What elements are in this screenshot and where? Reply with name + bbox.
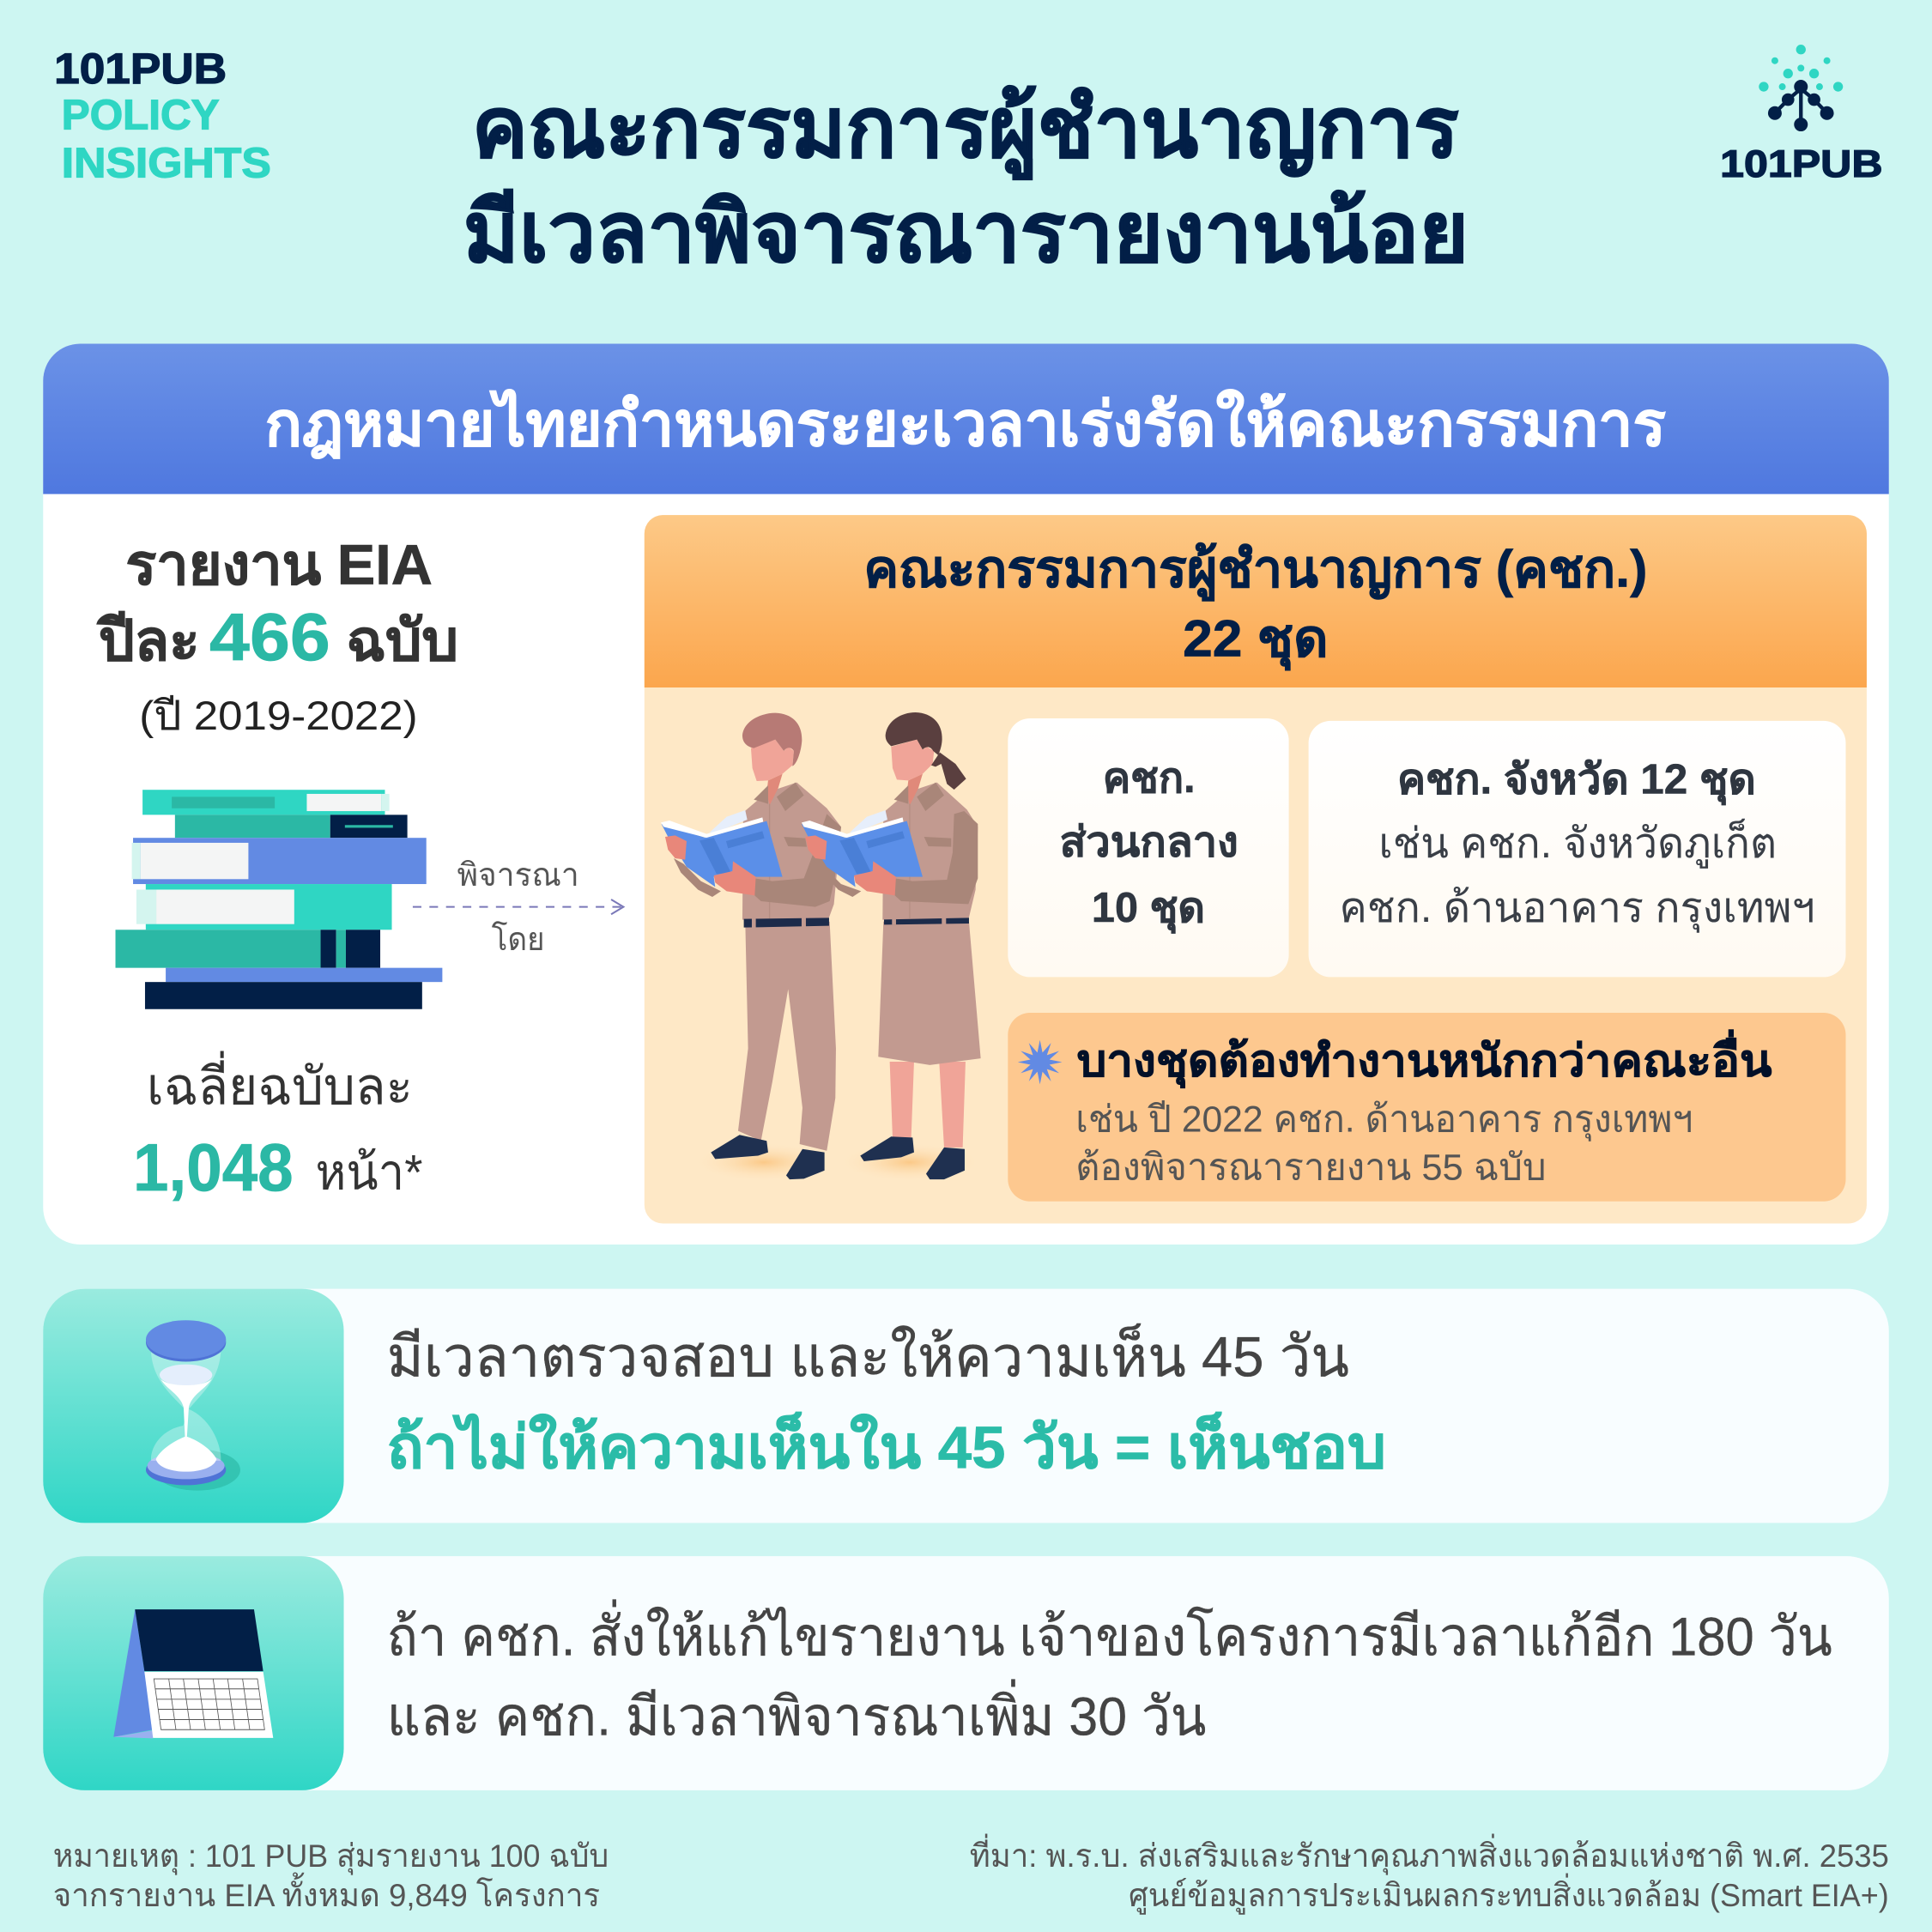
card: central committee [1008, 718, 1289, 977]
callout: heavier workload: บางชุดต้องทำงานหนักกว่าคณะอื่น [1077, 1029, 1772, 1088]
row: 45-day deadline [43, 1289, 1889, 1523]
source [970, 1833, 1889, 1915]
arrow: considered by: พิจารณา [457, 857, 579, 893]
logo: 101PUB network icon [1720, 45, 1883, 185]
committee header: 22 ชุด [1183, 609, 1329, 670]
average pages per report [133, 1051, 422, 1205]
arrow: considered by: โดย [492, 921, 545, 957]
card: provincial committee: คชก. จังหวัด 12 ชุด [1397, 757, 1756, 806]
EIA report count [96, 532, 458, 739]
icon tile [43, 1289, 344, 1523]
callout: heavier workload [1008, 1013, 1846, 1202]
icon: stack of books [116, 790, 442, 1009]
EIA report count: ฉบับ [346, 609, 458, 672]
title: คณะกรรมการผู้ชำนาญการ [472, 81, 1459, 180]
text: revision time [387, 1600, 1832, 1747]
icon: hourglass [146, 1320, 240, 1491]
text: 45-day rule [387, 1323, 1386, 1481]
panel: legal timeframe [43, 344, 1889, 1915]
EIA report count: (ปี 2019-2022) [139, 693, 418, 739]
title: มีเวลาพิจารณารายงานน้อย [463, 185, 1469, 279]
logo: 101PUB Policy Insights: INSIGHTS [62, 141, 271, 187]
text: 45-day rule: ถ้าไม่ให้ความเห็นใน 45 วัน = เห็นชอบ [387, 1412, 1386, 1481]
logo: 101PUB Policy Insights [54, 45, 271, 187]
man upper body [661, 713, 841, 928]
average pages per report: 1,048 [133, 1131, 294, 1205]
card: central committee: ส่วนกลาง [1060, 820, 1239, 866]
callout: heavier workload: ต้องพิจารณารายงาน 55 ฉบับ [1075, 1148, 1547, 1189]
logo: 101PUB network icon: 101PUB [1720, 143, 1883, 185]
text: revision time: ถ้า คชก. สั่งให้แก้ไขรายงาน เจ้าของโครงการมีเวลาแก้อีก 180 วัน [387, 1600, 1832, 1668]
callout: heavier workload: เช่น ปี 2022 คชก. ด้านอาคาร กรุงเทพฯ [1075, 1099, 1693, 1142]
logo: 101PUB Policy Insights: 101PUB [54, 45, 227, 93]
panel: expert committee [645, 515, 1867, 1224]
footnote: จากรายงาน EIA ทั้งหมด 9,849 โครงการ [53, 1872, 600, 1913]
text: revision time: และ คชก. มีเวลาพิจารณาเพิ่ม 30 วัน [387, 1679, 1206, 1747]
committee header [645, 515, 1867, 687]
EIA report count: รายงาน EIA [125, 532, 433, 596]
footnote: หมายเหตุ : 101 PUB สุ่มรายงาน 100 ฉบับ [53, 1838, 609, 1875]
title [463, 81, 1469, 279]
woman upper body [802, 712, 978, 924]
illustration: two officials reading books [661, 712, 981, 1182]
logo: 101PUB Policy Insights: POLICY [62, 93, 220, 139]
committee header: คณะกรรมการผู้ชำนาญการ (คชก.) [863, 539, 1647, 601]
text: 45-day rule: มีเวลาตรวจสอบ และให้ความเห็น 45 วัน [387, 1323, 1349, 1389]
source: ศูนย์ข้อมูลการประเมินผลกระทบสิ่งแวดล้อม (Smart EIA+) [1129, 1873, 1889, 1915]
card: provincial committee: เช่น คชก. จังหวัดภูเก็ต [1378, 818, 1777, 869]
EIA report count: 466 [209, 601, 330, 675]
icon: blue star [1018, 1040, 1062, 1084]
footnote [53, 1838, 609, 1913]
card: central committee: 10 ชุด [1092, 885, 1205, 934]
average pages per report: เฉลี่ยฉบับละ [147, 1051, 413, 1115]
average pages per report: หน้า* [316, 1145, 422, 1200]
card: central committee: คชก. [1103, 755, 1196, 802]
arrow: considered by [413, 857, 623, 957]
card: provincial committee [1309, 721, 1846, 977]
icon tile [43, 1556, 344, 1790]
panel header [43, 344, 1889, 494]
card: provincial committee: คชก. ด้านอาคาร กรุงเทพฯ [1339, 885, 1815, 933]
EIA report count: ปีละ [96, 609, 200, 672]
source: ที่มา: พ.ร.บ. ส่งเสริมและรักษาคุณภาพสิ่งแวดล้อมแห่งชาติ พ.ศ. 2535 [970, 1833, 1889, 1875]
row: 180-day revision [43, 1556, 1889, 1790]
icon: desk calendar [113, 1609, 273, 1738]
panel header: กฎหมายไทยกำหนดระยะเวลาเร่งรัดให้คณะกรรมการ [265, 388, 1666, 459]
